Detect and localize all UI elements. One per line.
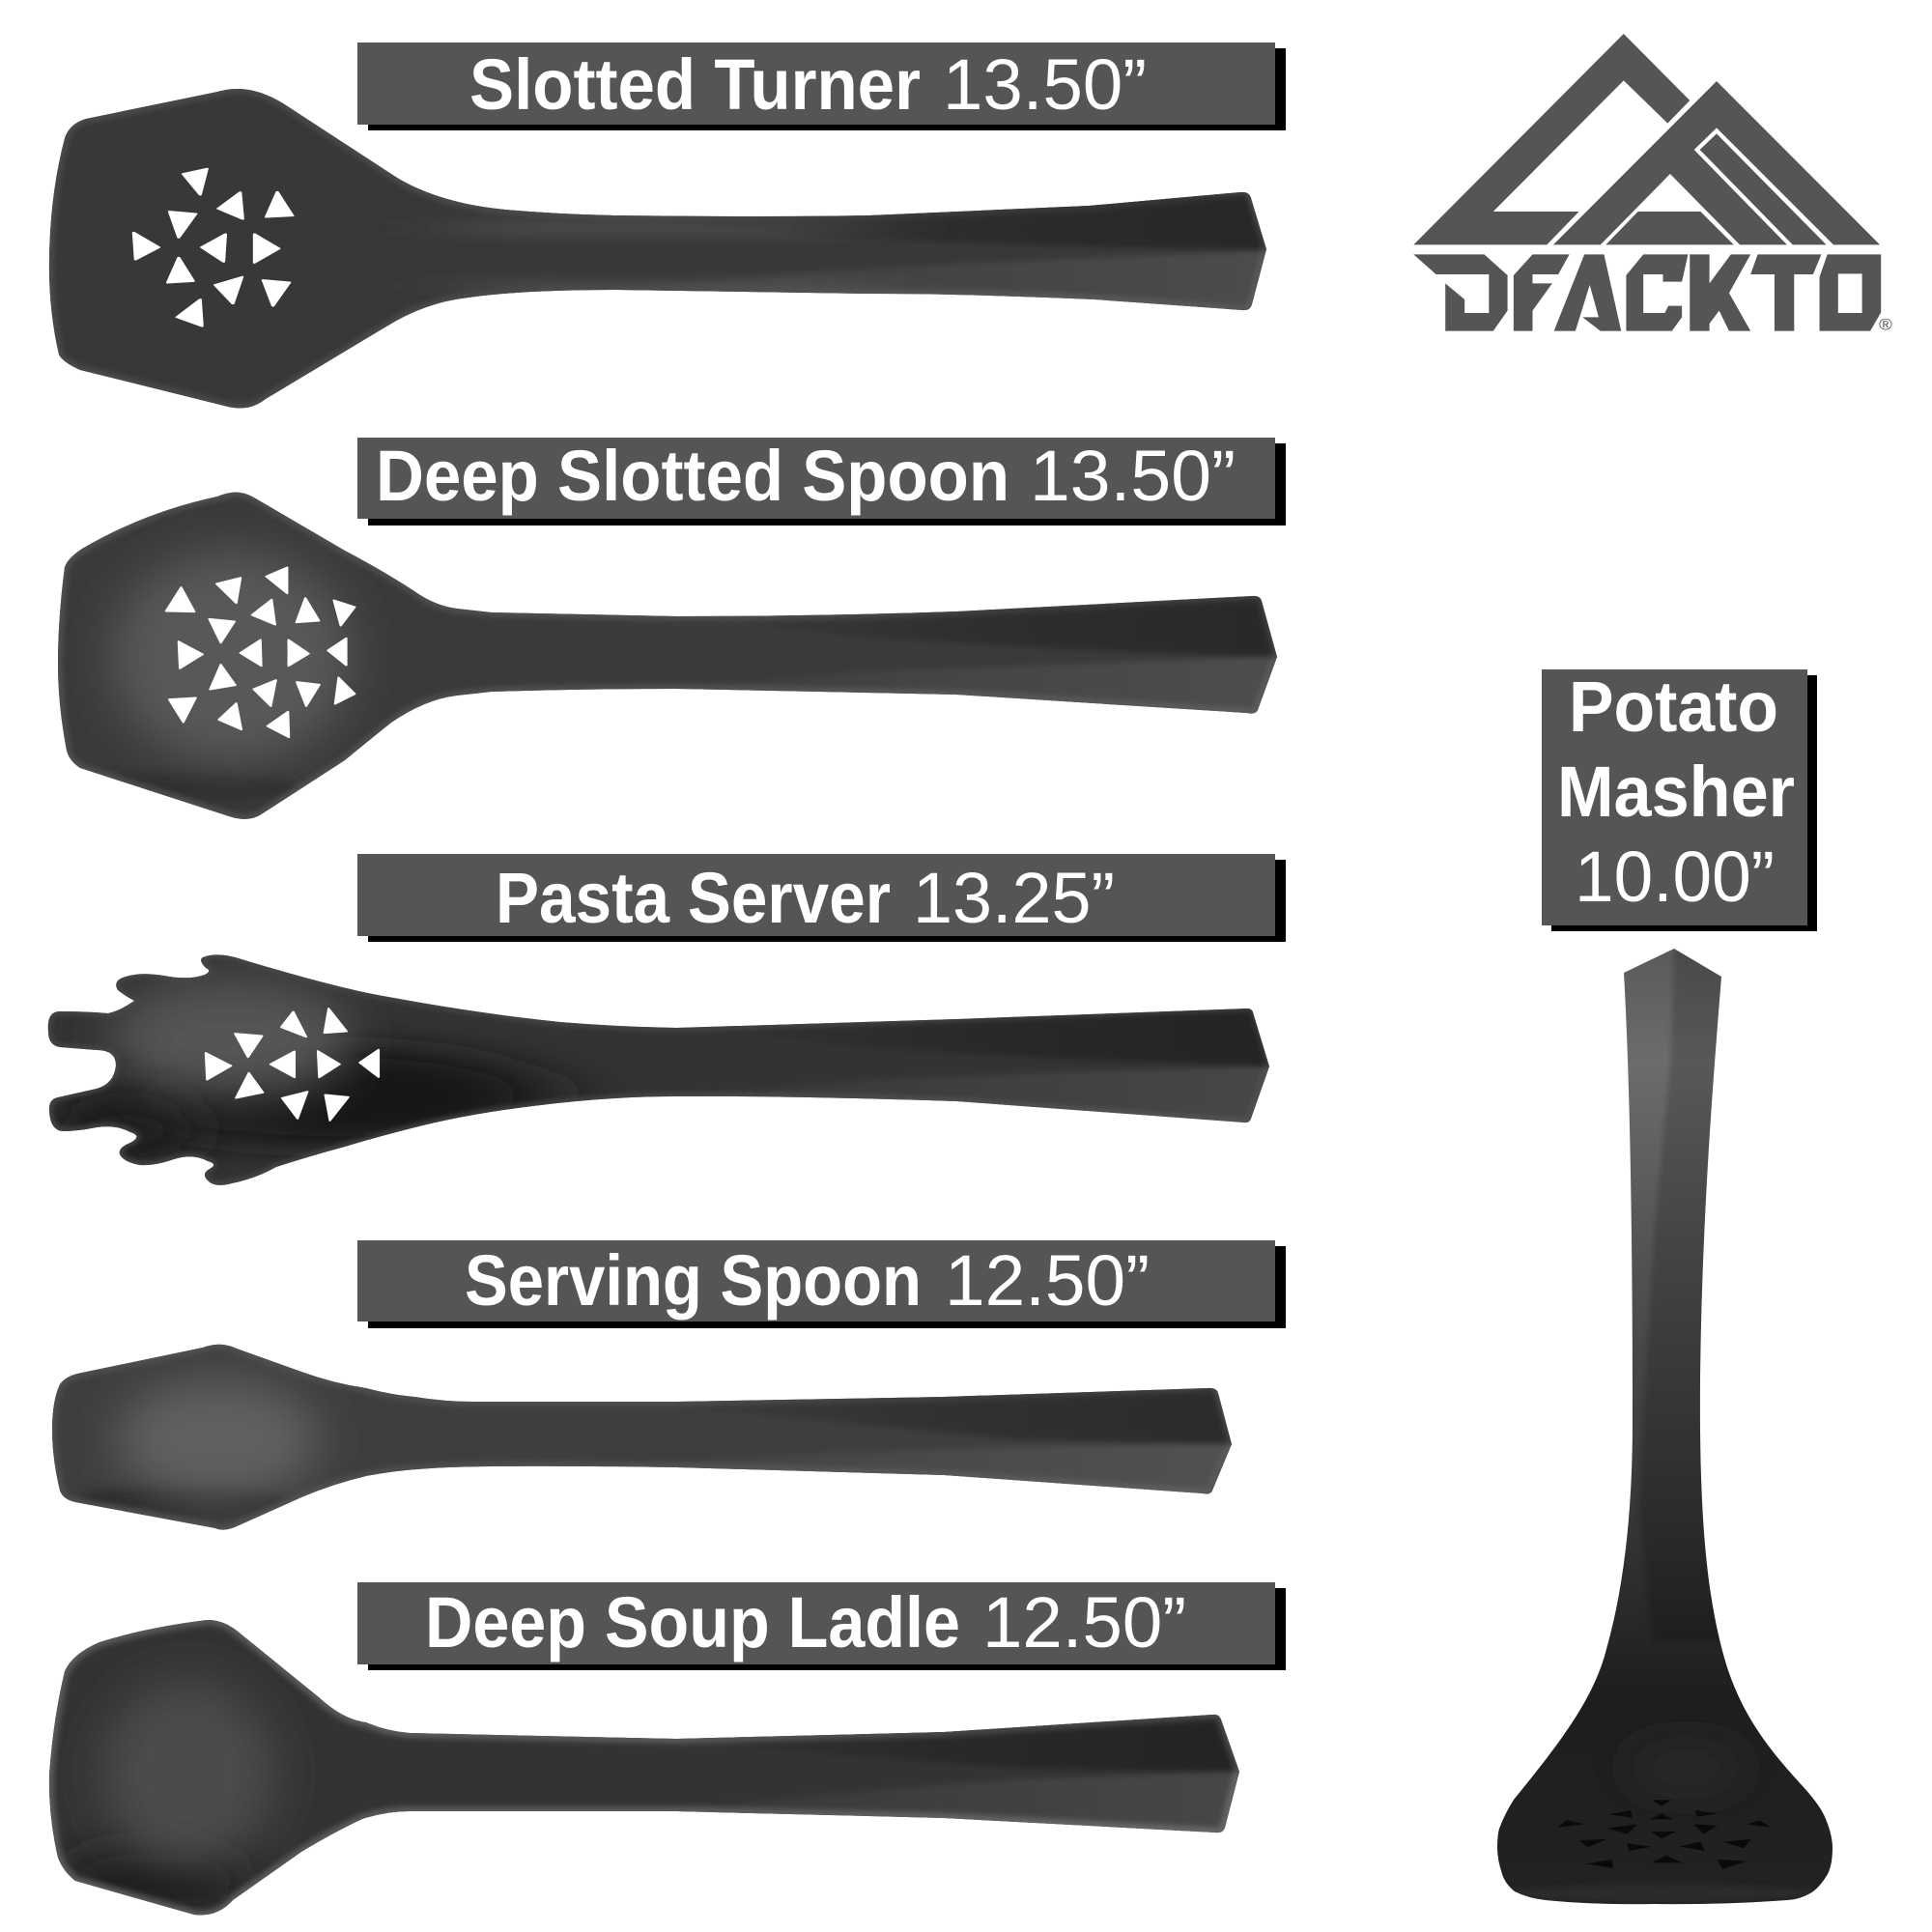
label: Deep Slotted Spoon <box>357 436 1286 526</box>
utensil: serving spoon <box>52 1345 1232 1530</box>
label: Pasta Server: Pasta Server <box>496 858 891 938</box>
label: Pasta Server <box>357 854 1286 942</box>
deep slotted spoon slots <box>166 567 355 737</box>
logo: DFACKTO <box>1413 34 1892 333</box>
label: Deep Slotted Spoon: Deep Slotted Spoon <box>376 436 1009 516</box>
label: Slotted Turner <box>357 43 1286 130</box>
utensil: deep slotted spoon <box>58 493 1277 819</box>
label: Slotted Turner: 13.50” <box>943 44 1147 125</box>
logo wordmark shapes <box>1413 254 1881 331</box>
serving spoon shading <box>52 1345 1232 1530</box>
label: Serving Spoon: 12.50” <box>945 1240 1150 1321</box>
utensil: pasta server <box>48 954 1269 1185</box>
registered mark: ® <box>1879 315 1892 333</box>
deep slotted spoon shading <box>58 493 1277 819</box>
masher holes <box>1558 1800 1771 1869</box>
label: Deep Soup Ladle <box>357 1582 1286 1670</box>
label: Slotted Turner: Slotted Turner <box>469 44 921 125</box>
label: Deep Slotted Spoon: 13.50” <box>1030 436 1236 516</box>
turner slots <box>133 169 293 327</box>
label: Serving Spoon: Serving Spoon <box>465 1240 922 1321</box>
turner shading <box>49 89 1266 408</box>
pasta server slots <box>206 1009 379 1121</box>
label: Potato Masher: 10.00” <box>1575 837 1775 917</box>
label: Deep Soup Ladle: 12.50” <box>982 1582 1186 1662</box>
label: Potato Masher: Masher <box>1557 752 1795 832</box>
utensil: potato masher <box>1497 949 1833 1904</box>
label: Serving Spoon <box>357 1240 1286 1328</box>
utensil: deep soup ladle <box>49 1620 1239 1915</box>
label: Potato Masher <box>1542 667 1817 931</box>
masher shading <box>1497 949 1826 1902</box>
logo mountains <box>1413 34 1880 244</box>
utensil: slotted turner <box>49 89 1266 408</box>
ladle shading <box>49 1620 1239 1915</box>
label: Pasta Server: 13.25” <box>913 858 1115 938</box>
pasta server shading <box>48 954 1269 1185</box>
label: Deep Soup Ladle: Deep Soup Ladle <box>425 1582 960 1662</box>
label: Potato Masher: Potato <box>1569 667 1778 747</box>
